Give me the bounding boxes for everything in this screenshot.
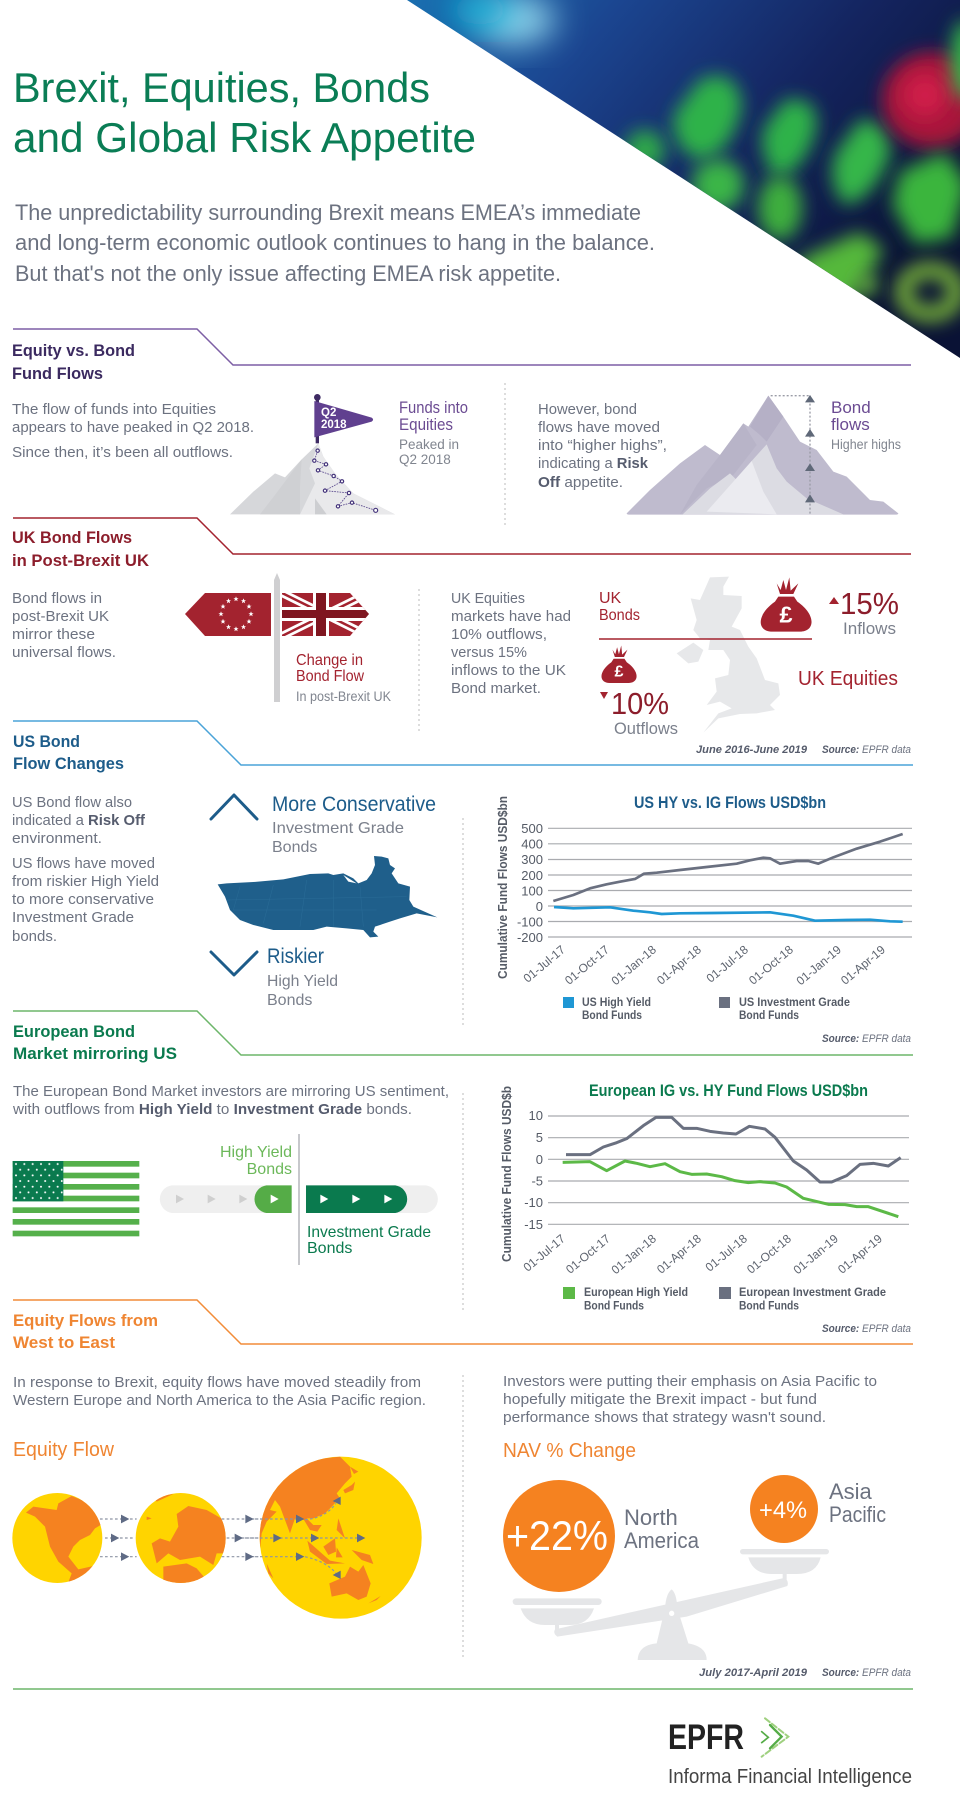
body text: bonds. — [12, 928, 57, 945]
body text left: appears to have peaked in Q2 2018. — [12, 419, 254, 436]
body text left: The flow of funds into Equities — [12, 401, 216, 418]
label: more conservative — [272, 793, 436, 856]
globe: Asia Pacific — [245, 1457, 422, 1619]
body text left — [13, 1374, 426, 1409]
label: funds into equities: Equities — [399, 415, 453, 434]
source note: Source: EPFR data — [822, 744, 911, 756]
subheading: NAV percent change: NAV % Change — [503, 1440, 636, 1462]
heading: Market mirroring US — [13, 1044, 177, 1063]
label: funds into equities: Funds into — [399, 398, 468, 417]
stat: 15 percent inflows: Inflows — [843, 619, 896, 638]
intro text: The unpredictability surrounding Brexit means EMEA’s immediate — [15, 200, 641, 225]
y axis labels: 0 — [536, 1152, 543, 1167]
label: UK Bonds — [599, 590, 640, 624]
label: more conservative: More Conservative — [272, 793, 436, 816]
logo: EPFR Informa Financial Intelligence — [668, 1718, 912, 1788]
chart: European IG vs HY flows — [499, 1081, 911, 1335]
icon: large money bag: £ — [780, 601, 793, 627]
x axis labels: 01-Oct-17 — [562, 942, 612, 988]
x axis labels: 01-Jul-17 — [521, 1231, 568, 1274]
globe: Europe — [136, 1493, 226, 1583]
label: UK Equities: UK Equities — [798, 668, 898, 690]
label: funds into equities: Q2 2018 — [399, 452, 451, 467]
icon: balance scale — [513, 1549, 829, 1660]
legend: European High Yield — [584, 1287, 688, 1299]
x axis labels: 01-Jan-19 — [791, 1231, 841, 1277]
icon: large money bag — [761, 577, 812, 632]
label: funds into equities: Peaked in — [399, 437, 459, 452]
label: funds into equities — [399, 398, 468, 467]
y axis labels: 5 — [536, 1130, 543, 1145]
label: change in bond flow: Change in — [296, 652, 363, 669]
globe: North America — [12, 1493, 103, 1587]
source note: Source: EPFR data — [822, 1667, 911, 1679]
header image: blurred market numbers triangle — [407, 0, 960, 358]
heading — [12, 528, 150, 570]
body text: indicated a Risk Off — [12, 812, 146, 829]
subheading: equity flow: Equity Flow — [13, 1439, 115, 1461]
body text: The European Bond Market investors are mirroring US sentiment, — [13, 1083, 449, 1100]
label: investment grade bonds: Investment Grade — [307, 1224, 431, 1241]
x axis labels: 01-Jan-19 — [794, 942, 844, 988]
y axis labels: -100 — [517, 914, 543, 930]
label: high yield bonds: High Yield — [220, 1144, 292, 1161]
x axis labels: 01-Apr-18 — [654, 942, 704, 988]
legend: US Investment Grade — [739, 997, 850, 1009]
heading: West to East — [13, 1333, 115, 1352]
body text right: However, bond — [538, 401, 637, 418]
stat: 15 percent inflows — [829, 586, 899, 638]
y axis labels: -200 — [517, 930, 543, 945]
heading — [13, 732, 124, 773]
label: high yield bonds — [220, 1144, 292, 1178]
heading: Flow Changes — [13, 754, 124, 773]
icon: mountain with flag — [230, 394, 395, 514]
line series — [563, 1117, 901, 1217]
icon: higher highs mountain — [627, 395, 898, 515]
legend — [563, 997, 850, 1022]
body text left: In response to Brexit, equity flows have moved steadily from — [13, 1374, 421, 1391]
body text — [12, 794, 159, 945]
heading: Equity vs. Bond — [12, 341, 135, 360]
x axis labels: 01-Oct-17 — [563, 1231, 613, 1277]
x axis labels: 01-Jul-18 — [704, 942, 751, 985]
body text right: Off appetite. — [538, 474, 623, 491]
label: bond flows: flows — [831, 415, 870, 434]
body text left — [12, 401, 254, 461]
stat: 10 percent outflows — [600, 686, 678, 738]
line series — [553, 834, 903, 922]
title: Brexit, Equities, Bonds — [13, 64, 430, 111]
y axis labels: 100 — [521, 884, 543, 898]
title — [13, 64, 476, 161]
y axis labels: 300 — [521, 852, 543, 867]
body text right: flows have moved — [538, 419, 660, 436]
source note: Source: EPFR data — [822, 1033, 911, 1045]
source note — [696, 744, 911, 756]
label: riskier: Riskier — [267, 945, 324, 968]
body text left: Western Europe and North America to the Asia Pacific region. — [13, 1392, 426, 1409]
heading: in Post-Brexit UK — [12, 551, 150, 570]
icon: chevron down — [211, 952, 257, 975]
icon: green US flag — [13, 1161, 139, 1236]
source note: June 2016-June 2019 — [696, 744, 808, 756]
legend: European Investment Grade — [739, 1287, 886, 1299]
y axis labels: 400 — [521, 836, 543, 852]
stat: North America +22% — [503, 1480, 700, 1592]
heading — [13, 1022, 177, 1063]
body text: with outflows from High Yield to Investment Grade bonds. — [12, 1101, 412, 1118]
label: bond flows — [831, 398, 901, 452]
x axis labels — [521, 942, 888, 988]
body text middle: UK Equities — [451, 590, 525, 607]
body text left: mirror these — [12, 626, 95, 643]
label: investment grade bonds — [307, 1224, 431, 1257]
y axis labels — [524, 1108, 543, 1232]
icon: mountain with flag: Q2 — [321, 407, 336, 419]
logo: EPFR Informa Financial Intelligence: EPFR — [668, 1718, 744, 1757]
heading: Fund Flows — [12, 364, 103, 383]
body text: from riskier High Yield — [12, 873, 159, 890]
body text left: Bond flows in — [12, 590, 102, 607]
body text right: Investors were putting their emphasis on Asia Pacific to — [503, 1373, 877, 1390]
label: more conservative: Investment Grade — [272, 820, 404, 837]
logo: EPFR Informa Financial Intelligence: Informa Financial Intelligence — [668, 1766, 912, 1788]
intro text: But that's not the only issue affecting EMEA risk appetite. — [15, 261, 561, 286]
x axis labels: 01-Jul-18 — [703, 1231, 750, 1274]
map: United Kingdom — [677, 577, 780, 733]
stat: North America +22%: +22% — [506, 1512, 608, 1559]
body text middle: Bond market. — [451, 680, 541, 697]
stat: Asia Pacific +4%: Pacific — [829, 1502, 886, 1527]
label: UK Bonds: UK — [599, 590, 622, 607]
label: investment grade bonds: Bonds — [307, 1240, 352, 1257]
stat: 10 percent outflows: Outflows — [614, 719, 678, 738]
body text middle: 10% outflows, — [451, 626, 547, 643]
legend: Bond Funds — [584, 1300, 644, 1312]
x axis labels: 01-Apr-18 — [654, 1231, 704, 1277]
section: equity vs bond — [12, 329, 911, 525]
legend: Bond Funds — [739, 1300, 799, 1312]
stat: Asia Pacific +4%: Asia — [829, 1479, 873, 1504]
icon: chevron up — [211, 795, 257, 819]
heading: European Bond — [13, 1022, 135, 1041]
label: riskier: High Yield — [267, 973, 338, 990]
body text right — [538, 401, 667, 491]
heading: UK Bond Flows — [12, 528, 132, 547]
section: equity flows west to east — [12, 1300, 913, 1679]
label: change in bond flow — [296, 652, 391, 704]
body text: US Bond flow also — [12, 794, 132, 811]
stat: North America +22%: America — [624, 1528, 700, 1553]
icon: small money bag — [601, 645, 637, 683]
body text right: into “higher highs”, — [538, 437, 667, 454]
section: European bond market — [12, 1011, 913, 1335]
chart: US HY vs IG flows — [495, 793, 912, 1045]
y axis labels: -10 — [524, 1195, 543, 1210]
label: bond flows: Higher highs — [831, 437, 901, 452]
y axis labels: -5 — [531, 1174, 543, 1188]
label: bond flows: Bond — [831, 398, 871, 417]
icon: signpost EU and UK — [185, 573, 369, 702]
x axis labels: 01-Oct-18 — [744, 1231, 794, 1277]
stat: 15 percent inflows: 15% — [840, 586, 899, 621]
body text middle: versus 15% — [451, 644, 527, 661]
heading — [13, 1311, 158, 1352]
stat: 10 percent outflows: 10% — [611, 686, 669, 721]
chart title: European IG vs. HY Fund Flows USD$bn — [589, 1081, 868, 1100]
label: change in bond flow: In post-Brexit UK — [296, 689, 391, 704]
x axis labels: 01-Apr-19 — [835, 1231, 885, 1277]
icon: mountain with flag: 2018 — [321, 419, 347, 431]
body text: US flows have moved — [12, 855, 155, 872]
intro text: and long-term economic outlook continues to hang in the balance. — [15, 230, 655, 255]
stat: North America +22%: North — [624, 1505, 678, 1530]
x axis labels: 01-Jul-17 — [521, 942, 568, 985]
arrows: dashed flows to the left of globe three — [100, 1515, 258, 1561]
y axis title: Cumulative Fund Flows USD$bn — [495, 796, 510, 979]
label: more conservative: Bonds — [272, 839, 317, 856]
legend: Bond Funds — [582, 1010, 642, 1022]
body text middle — [451, 590, 571, 697]
x axis labels: 01-Oct-18 — [746, 942, 796, 988]
label: riskier — [267, 945, 338, 1009]
body text — [12, 1083, 449, 1118]
stat: Asia Pacific +4%: +4% — [759, 1497, 807, 1524]
body text right: indicating a Risk — [538, 455, 649, 472]
y axis title: Cumulative Fund Flows USD$b — [499, 1086, 514, 1262]
source note: Source: EPFR data — [822, 1323, 911, 1335]
chart title: US HY vs. IG Flows USD$bn — [634, 793, 826, 812]
legend — [563, 1287, 886, 1312]
flow track: high yield — [160, 1185, 292, 1213]
body text: environment. — [12, 830, 102, 847]
heading — [12, 341, 135, 383]
x axis labels: 01-Apr-19 — [838, 942, 888, 988]
body text right: hopefully mitigate the Brexit impact - but fund — [503, 1391, 817, 1408]
source note — [699, 1667, 911, 1679]
map: United States — [218, 856, 437, 937]
icon: EPFR chevrons — [762, 1718, 788, 1757]
y axis labels: 0 — [536, 899, 543, 914]
x axis labels: 01-Jan-18 — [609, 1231, 659, 1277]
section: UK bond flows — [12, 518, 911, 756]
body text left — [12, 590, 116, 661]
x axis labels: 01-Jan-18 — [609, 942, 659, 988]
x axis labels — [521, 1231, 885, 1277]
body text: to more conservative — [12, 891, 154, 908]
body text left: Since then, it’s been all outflows. — [12, 444, 233, 461]
label: UK Bonds: Bonds — [599, 607, 640, 624]
y axis labels: 10 — [529, 1108, 543, 1123]
heading: Equity Flows from — [13, 1311, 158, 1330]
section: US bond flows — [12, 721, 913, 1045]
body text left: universal flows. — [12, 644, 116, 661]
source note: July 2017-April 2019 — [699, 1667, 808, 1679]
heading: US Bond — [13, 732, 80, 751]
flow track: investment grade — [306, 1185, 438, 1213]
label: riskier: Bonds — [267, 992, 312, 1009]
y axis labels: 500 — [521, 821, 543, 836]
body text middle: markets have had — [451, 608, 571, 625]
label: high yield bonds: Bonds — [247, 1161, 292, 1178]
body text: Investment Grade — [12, 909, 134, 926]
legend: US High Yield — [582, 997, 651, 1009]
y axis labels: 200 — [521, 868, 543, 883]
icon: small money bag: £ — [614, 663, 623, 681]
title: and Global Risk Appetite — [13, 114, 476, 161]
legend: Bond Funds — [739, 1010, 799, 1022]
stat: Asia Pacific +4% — [750, 1475, 886, 1543]
body text left: post-Brexit UK — [12, 608, 109, 625]
y axis labels — [517, 821, 543, 945]
body text right: performance shows that strategy wasn't sound. — [503, 1409, 826, 1426]
body text middle: inflows to the UK — [451, 662, 566, 679]
label: change in bond flow: Bond Flow — [296, 668, 364, 685]
intro text — [15, 200, 655, 286]
y axis labels: -15 — [524, 1217, 543, 1232]
body text right — [503, 1373, 877, 1426]
